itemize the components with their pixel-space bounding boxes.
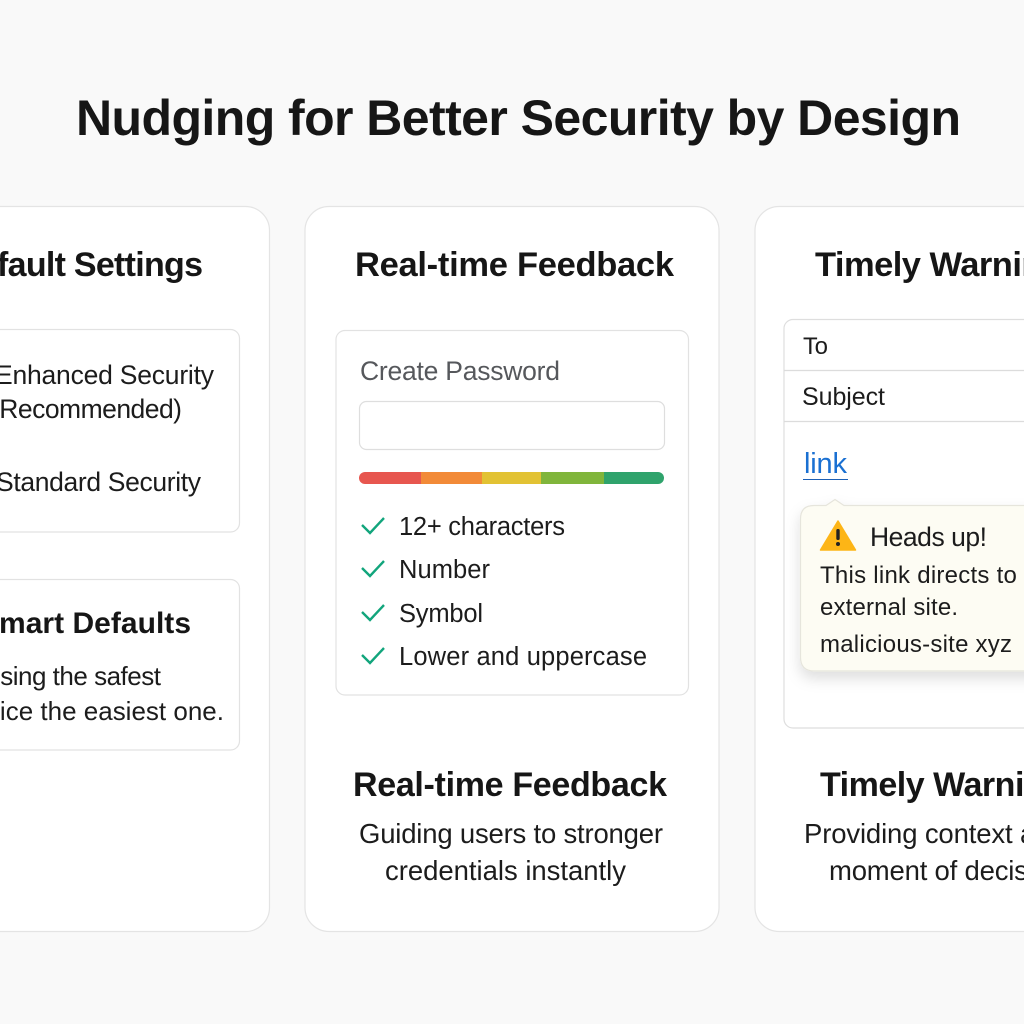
checklist [362,513,647,671]
panel: real-time feedback [305,206,719,932]
checklist: Symbol [399,600,483,628]
checklist: Number [399,556,490,584]
heading: real-time feedback top: Real-time Feedback [355,246,675,284]
warning tooltip: Heads up! [870,522,987,552]
description: real-time feedback: Guiding users to stronger [359,818,663,849]
security options box [0,330,240,532]
warning tooltip: malicious-site xyz [820,631,1012,658]
heading: real-time feedback bottom: Real-time Feedback [353,766,667,804]
checklist: 12+ characters [399,513,565,541]
password input [360,402,664,450]
smart defaults box [0,580,240,750]
link: link [804,448,848,480]
password form box [336,330,688,695]
description: real-time feedback [359,818,663,886]
security options box: Enhanced Security [0,360,215,390]
warning tooltip [800,500,1024,671]
icon: warning triangle [820,521,856,550]
strength meter [359,472,664,484]
description: timely warning [804,818,1024,886]
security options box: Standard Security [0,467,202,497]
email mock: To [803,333,828,360]
panel: timely warnings [755,206,1024,932]
warning tooltip: external site. [820,594,958,621]
label: create password: Create Password [360,356,560,386]
title: Nudging for Better Security by Design [76,90,961,146]
email mock [784,320,1024,728]
checklist: Lower and uppercase [399,643,647,671]
panel: default settings [0,206,270,932]
email mock: Subject [802,383,885,411]
description: real-time feedback: credentials instantly [385,855,626,886]
